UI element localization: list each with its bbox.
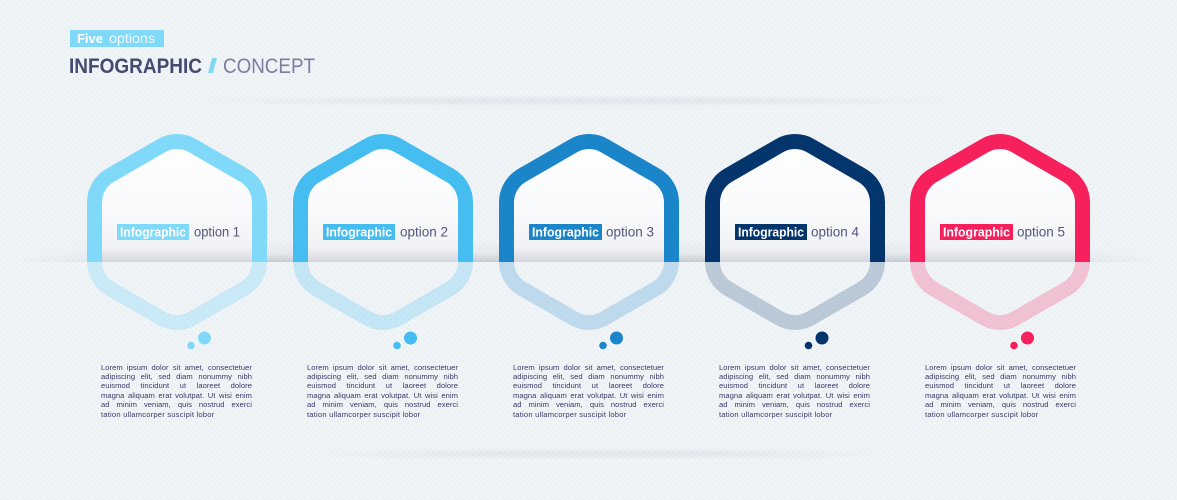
text block 1: magna aliquam erat volutpat. Ut wisi enim [101, 391, 252, 400]
hexagon 4 [712, 142, 878, 322]
hexagon 2 [300, 142, 466, 322]
text block 3: magna aliquam erat volutpat. Ut wisi enim [513, 391, 664, 400]
text block 3: euismod tincidunt ut laoreet dolore [513, 381, 664, 390]
label 3: option 3 [606, 224, 654, 240]
label 5: Infographic [943, 224, 1010, 240]
text block 2: ad minim veniam, quis nostrud exerci [307, 400, 458, 409]
text block 5: Lorem ipsum dolor sit amet, consectetuer [925, 362, 1076, 372]
text block 5: ad minim veniam, quis nostrud exerci [925, 400, 1076, 409]
text block 4: euismod tincidunt ut laoreet dolore [719, 381, 870, 390]
label 3 [529, 224, 654, 240]
text block 1: adipiscing elit, sed diam nonummy nibh [101, 372, 252, 381]
hexagon 5 [918, 142, 1082, 322]
title: CONCEPT [223, 55, 315, 78]
dots 5 [1010, 332, 1034, 349]
label 3: Infographic [532, 224, 599, 240]
text block 1: tation ullamcorper suscipit lobor [101, 410, 214, 419]
text block 5 [925, 362, 1076, 419]
text block 4: magna aliquam erat volutpat. Ut wisi enim [719, 391, 870, 400]
top shadow line [180, 99, 970, 103]
text block 1: Lorem ipsum dolor sit amet, consectetuer [101, 362, 252, 372]
text block 3: Lorem ipsum dolor sit amet, consectetuer [513, 362, 664, 372]
label 5: option 5 [1017, 224, 1065, 240]
text block 4: adipiscing elit, sed diam nonummy nibh [719, 372, 870, 381]
text block 1 [101, 362, 252, 419]
text block 2: Lorem ipsum dolor sit amet, consectetuer [307, 362, 458, 372]
label 2 [323, 224, 448, 240]
label 1 [117, 224, 240, 240]
label 1: option 1 [194, 224, 240, 240]
tag: five options: options [109, 30, 155, 46]
dots 3 [599, 332, 623, 349]
label 2: Infographic [326, 224, 392, 240]
text block 1: euismod tincidunt ut laoreet dolore [101, 381, 252, 390]
text block 3: ad minim veniam, quis nostrud exerci [513, 400, 664, 409]
dots 1 [187, 332, 211, 349]
text block 5: euismod tincidunt ut laoreet dolore [925, 381, 1076, 390]
dots 2 [393, 332, 417, 349]
label 4 [735, 224, 859, 240]
horizon shadow band [60, 250, 1118, 262]
text block 2: magna aliquam erat volutpat. Ut wisi enim [307, 391, 458, 400]
text block 5: magna aliquam erat volutpat. Ut wisi enim [925, 391, 1076, 400]
tag: five options: Five [77, 31, 103, 46]
hexagon 1 [94, 142, 259, 322]
text block 2: adipiscing elit, sed diam nonummy nibh [307, 372, 458, 381]
text block 5: tation ullamcorper suscipit lobor [925, 410, 1038, 419]
text block 4 [719, 362, 870, 419]
text block 2: tation ullamcorper suscipit lobor [307, 410, 420, 419]
bottom shadow line [300, 452, 900, 456]
label 5 [940, 224, 1065, 240]
text block 2: euismod tincidunt ut laoreet dolore [307, 381, 458, 390]
title: INFOGRAPHIC [69, 55, 202, 78]
text block 3: tation ullamcorper suscipit lobor [513, 410, 626, 419]
text block 2 [307, 362, 458, 419]
dots 4 [805, 332, 828, 349]
text block 1: ad minim veniam, quis nostrud exerci [101, 400, 252, 409]
tag: five options [70, 30, 164, 47]
label 4: Infographic [738, 224, 804, 240]
text block 4: tation ullamcorper suscipit lobor [719, 410, 832, 419]
text block 5: adipiscing elit, sed diam nonummy nibh [925, 372, 1076, 381]
text block 3: adipiscing elit, sed diam nonummy nibh [513, 372, 664, 381]
text block 3 [513, 362, 664, 419]
label 2: option 2 [400, 224, 448, 240]
text block 4: ad minim veniam, quis nostrud exerci [719, 400, 870, 409]
label 4: option 4 [811, 224, 859, 240]
text block 4: Lorem ipsum dolor sit amet, consectetuer [719, 362, 870, 372]
label 1: Infographic [120, 224, 186, 240]
hexagon 3 [506, 142, 672, 322]
title [69, 55, 315, 78]
